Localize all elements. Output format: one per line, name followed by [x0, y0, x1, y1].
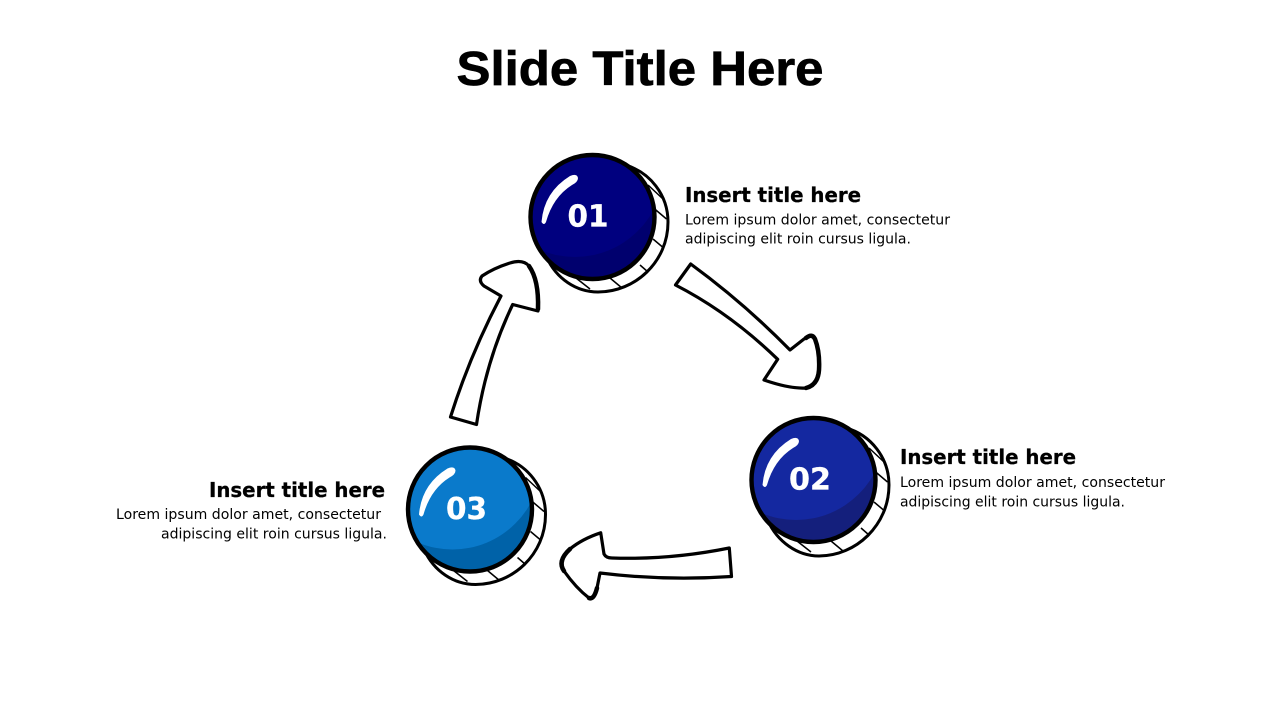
body: adipiscing elit roin cursus ligula.	[685, 230, 911, 248]
step 01 badge	[528, 152, 670, 294]
text block: step 01	[685, 183, 950, 248]
sphere	[749, 416, 878, 544]
step 03 badge	[406, 445, 547, 586]
number 03: 03	[446, 492, 487, 527]
body: adipiscing elit roin cursus ligula.	[161, 526, 387, 542]
highlight	[419, 467, 456, 516]
hatched back disc	[424, 458, 546, 584]
title: Slide Title Here	[456, 43, 824, 96]
sphere	[528, 152, 657, 282]
body: adipiscing elit roin cursus ligula.	[900, 494, 1125, 510]
highlight	[762, 438, 799, 487]
number 01: 01	[568, 200, 608, 234]
body	[116, 506, 387, 542]
arrow: step 3 to step 1	[450, 262, 538, 424]
body: Lorem ipsum dolor amet, consectetur	[685, 212, 950, 228]
arrow: step 2 to step 3	[562, 533, 732, 598]
sphere	[406, 445, 534, 574]
text block: step 03	[116, 478, 387, 542]
heading: Insert title here	[209, 478, 385, 502]
arrow: step 1 to step 2	[676, 264, 819, 388]
highlight	[542, 175, 578, 224]
body	[900, 474, 1165, 510]
text block: step 02	[900, 445, 1165, 510]
number 02: 02	[789, 462, 831, 498]
hatched back disc	[546, 165, 668, 292]
heading: Insert title here	[685, 183, 861, 207]
body	[685, 212, 950, 248]
step 02 badge	[749, 416, 890, 558]
body: Lorem ipsum dolor amet, consectetur	[116, 506, 381, 523]
body: Lorem ipsum dolor amet, consectetur	[900, 474, 1165, 491]
heading: Insert title here	[900, 445, 1076, 469]
hatched back disc	[768, 428, 889, 556]
